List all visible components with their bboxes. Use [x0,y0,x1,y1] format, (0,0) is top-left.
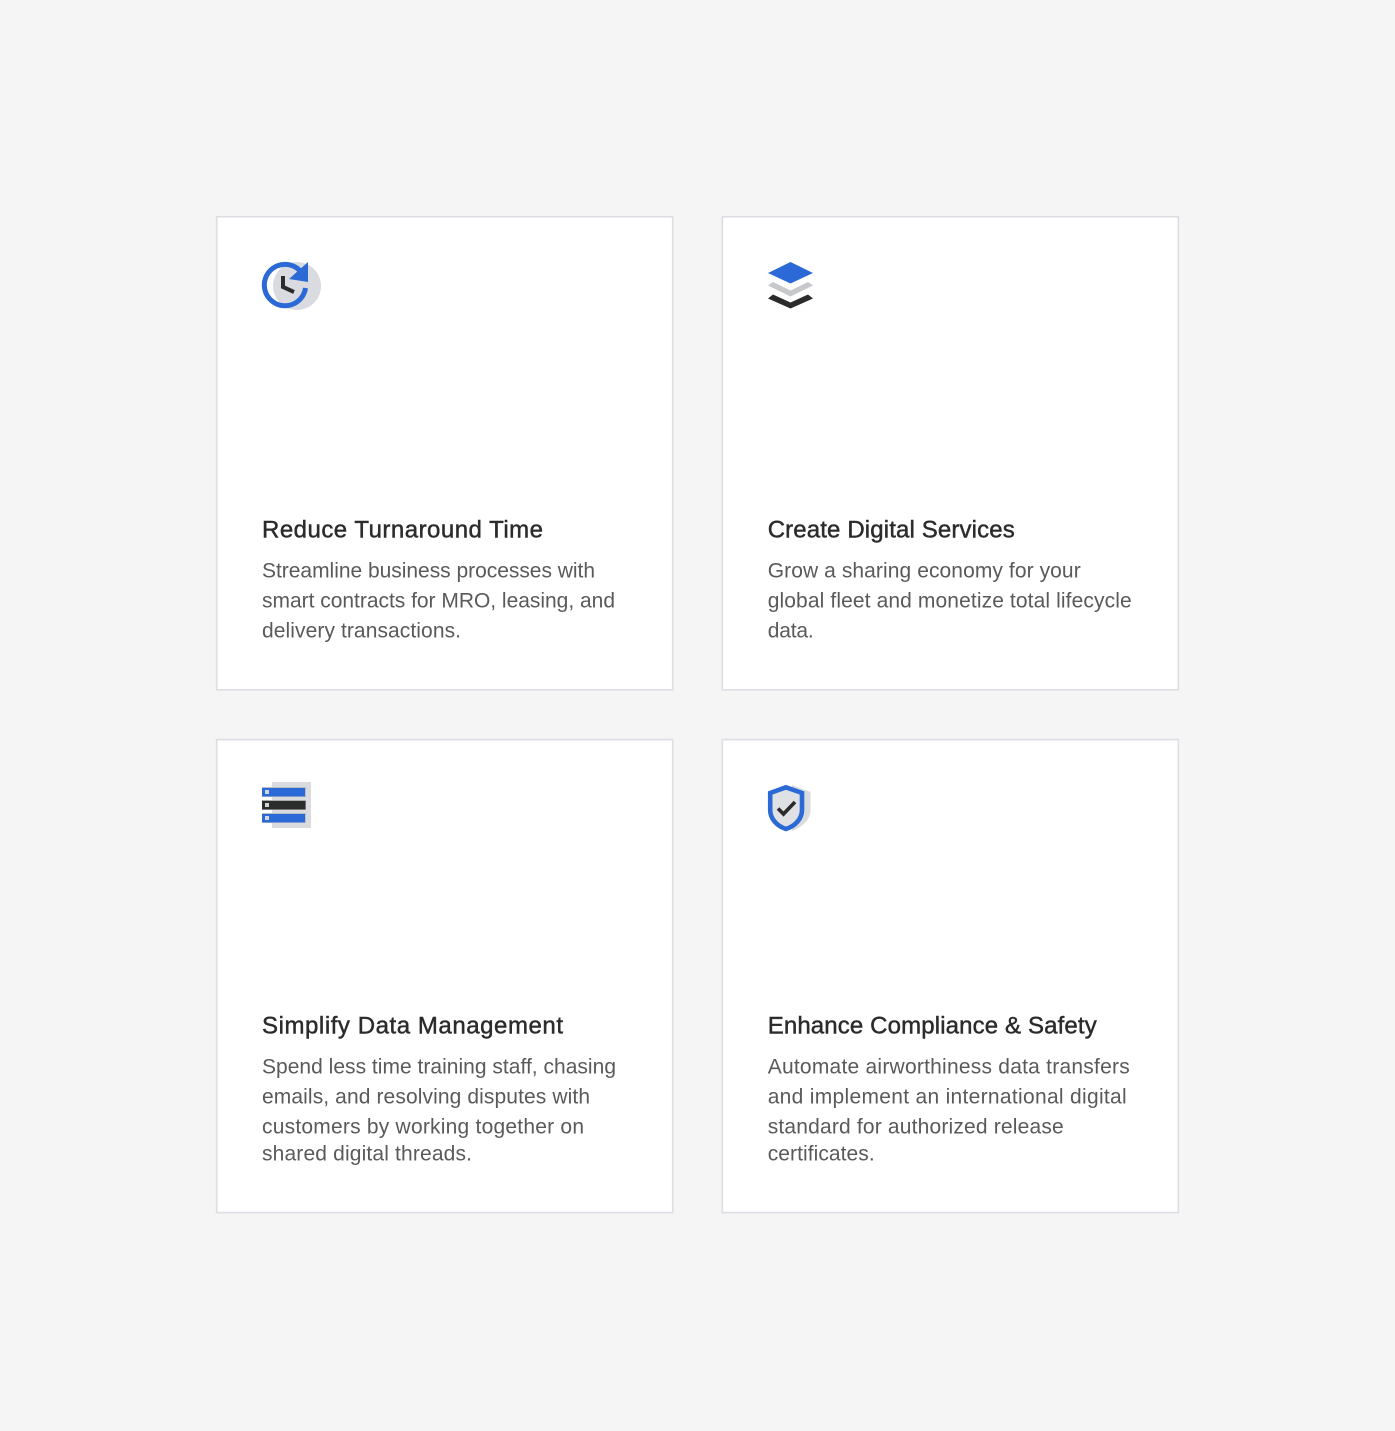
body text: Spend less time training staff, chasing [262,1055,616,1078]
body text: global fleet and monetize total lifecycle [768,589,1132,612]
heading: Simplify Data Management [262,1012,563,1039]
body text: data. [768,619,814,642]
body text [768,1055,1130,1165]
body text [262,1055,616,1165]
heading: Reduce Turnaround Time [262,516,543,543]
body text: Streamline business processes with [262,559,595,582]
body text: Automate airworthiness data transfers [768,1055,1130,1078]
panel: reduce turnaround time [217,217,673,690]
body text: shared digital threads. [262,1142,472,1165]
panel: enhance compliance and safety [722,740,1178,1213]
heading: Enhance Compliance & Safety [768,1012,1097,1039]
panel: simplify data management [217,740,673,1213]
body text: and implement an international digital [768,1085,1127,1108]
body text: certificates. [768,1142,875,1165]
body text: emails, and resolving disputes with [262,1085,590,1108]
icon: clock with arrow [264,262,321,310]
body text: delivery transactions. [262,619,461,642]
body text [768,559,1132,642]
body text: Grow a sharing economy for your [768,559,1081,582]
body text: standard for authorized release [768,1115,1064,1138]
body text: customers by working together on [262,1115,584,1138]
body text [262,559,615,642]
panel: create digital services [722,217,1178,690]
icon: server stack [262,782,311,828]
icon: layers [768,262,813,308]
icon: shield with check [770,785,810,831]
body text: smart contracts for MRO, leasing, and [262,589,615,612]
heading: Create Digital Services [768,516,1015,543]
